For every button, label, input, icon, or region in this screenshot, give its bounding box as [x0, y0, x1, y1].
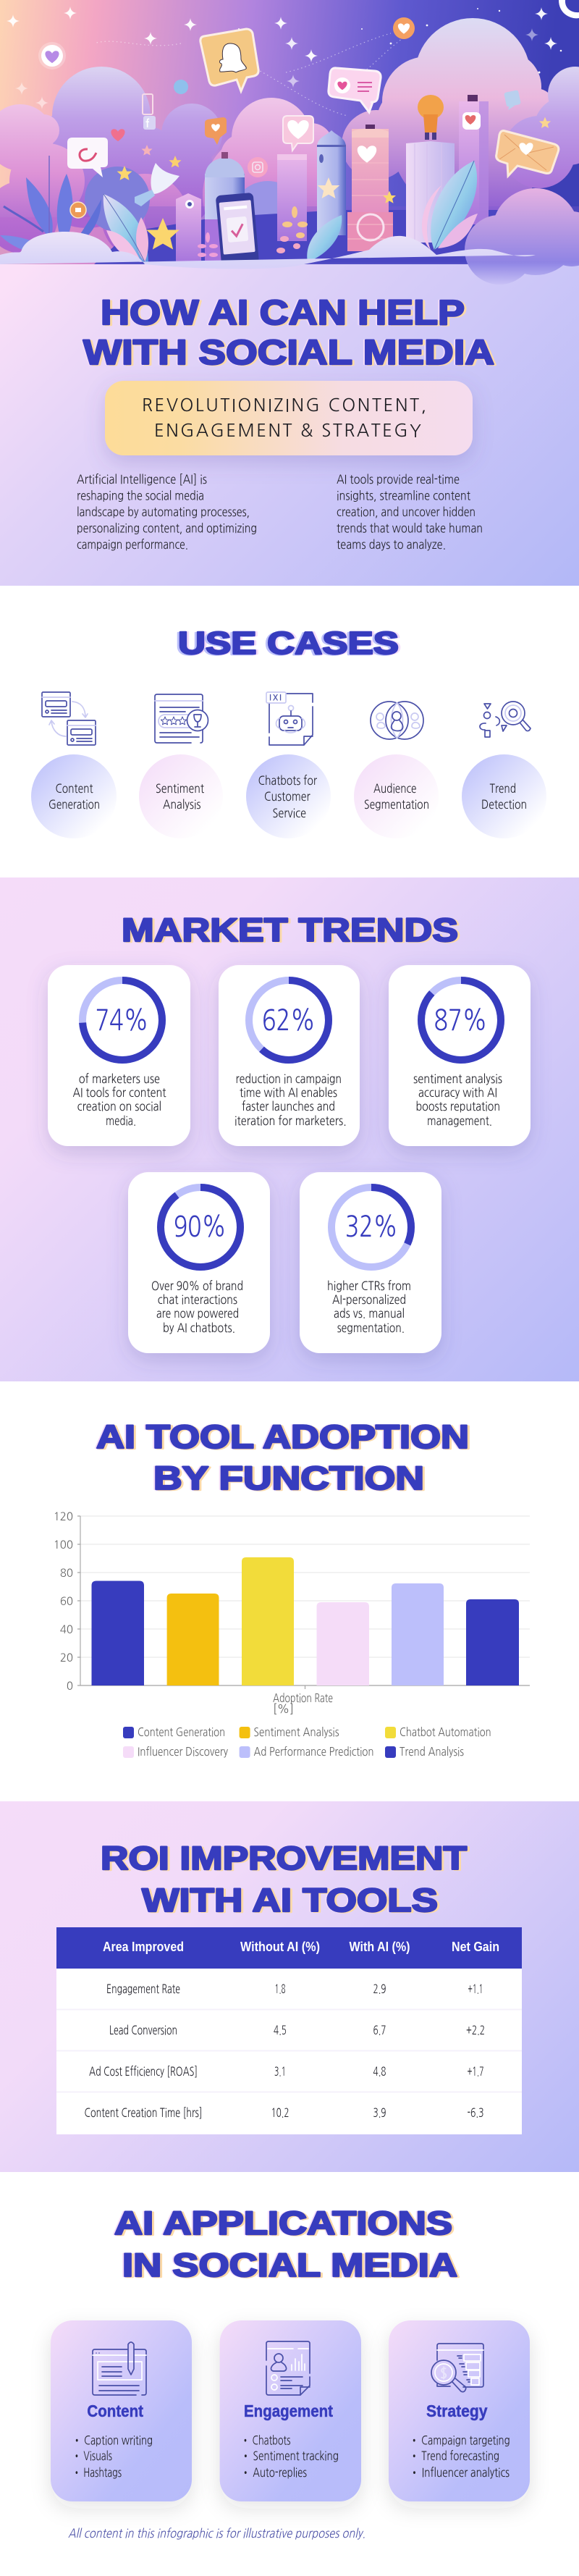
- table: 3.1: [274, 2066, 286, 2078]
- use case labels: Trend: [489, 783, 516, 795]
- table: 1.8: [275, 1983, 285, 1995]
- intro text left: Artificial Intelligence [AI] is: [77, 473, 207, 486]
- card: 87%: sentiment analysis: [413, 1073, 502, 1085]
- card: content: • Caption writing: [72, 2434, 153, 2447]
- title: HOW AI CAN HELP: [101, 294, 465, 332]
- intro text left: landscape by automating processes,: [77, 506, 250, 518]
- use case labels: Segmentation: [364, 799, 429, 811]
- chart legend: Chatbot Automation: [400, 1727, 491, 1738]
- icon: yellow sprig: [276, 206, 308, 253]
- card: strategy: [389, 2320, 530, 2501]
- card: 74%: 74%: [96, 1006, 149, 1035]
- subtitle pill: REVOLUTIONIZING CONTENT,: [142, 397, 426, 414]
- intro text right: AI tools provide real-time: [337, 473, 460, 486]
- bar chart: 60: [60, 1596, 73, 1607]
- icon: phone with check: [216, 193, 259, 266]
- heading: applications: [114, 2205, 457, 2284]
- icon: magnifier and window: $: [439, 2366, 448, 2381]
- heading: applications: IN SOCIAL MEDIA: [122, 2247, 457, 2284]
- card: 87%: [389, 965, 531, 1146]
- icon: paintbrush: [135, 163, 179, 206]
- intro text right: insights, streamline content: [337, 489, 471, 502]
- icon: chatbot: IXI: [269, 694, 283, 702]
- card: 62%: reduction in campaign: [236, 1073, 342, 1085]
- icon: chat bubble with heart: [329, 68, 381, 112]
- use case labels: Generation: [48, 799, 100, 811]
- bar chart: 80: [60, 1568, 73, 1579]
- icon: snapchat bubble: [200, 29, 258, 91]
- bar chart: 0: [67, 1681, 73, 1692]
- intro text left: reshaping the social media: [77, 489, 204, 502]
- use case labels: Audience: [373, 783, 417, 795]
- icon: floating heart: [111, 129, 125, 141]
- card: 62%: [219, 965, 360, 1146]
- icon: feather leaf left: [103, 194, 148, 264]
- intro text left: personalizing content, and optimizing: [77, 523, 257, 534]
- intro text right: [337, 473, 483, 551]
- title: [83, 294, 494, 372]
- icon: profile report: [266, 2341, 310, 2395]
- card: 87%: accuracy with AI: [418, 1087, 497, 1099]
- card: engagement: • Sentiment tracking: [241, 2450, 339, 2462]
- bar chart: [54, 1512, 530, 1715]
- icon: envelope bubble: [496, 131, 559, 176]
- table: Lead Conversion: [109, 2024, 177, 2037]
- card: 90%: 90%: [174, 1212, 227, 1241]
- table: Without AI (%): [240, 1940, 320, 1954]
- panel: adoption chart: [0, 1381, 579, 1801]
- heading: adoption: [96, 1418, 469, 1497]
- card: 74%: [48, 965, 190, 1146]
- use case labels: Analysis: [163, 799, 201, 811]
- table: -6.3: [468, 2107, 483, 2119]
- table: 3.9: [373, 2107, 386, 2119]
- icon: camera badge: [248, 157, 268, 177]
- icon: small leaf centre: [307, 215, 342, 262]
- icon: pink sprig: [198, 232, 218, 257]
- icon: heart on pink tower: [358, 146, 376, 163]
- back clouds right: [342, 18, 556, 217]
- use case labels: Service: [272, 807, 306, 820]
- dark base: [94, 210, 498, 264]
- card: strategy: • Influencer analytics: [410, 2467, 510, 2479]
- card: 74%: creation on social: [77, 1100, 161, 1113]
- panel: use cases: [0, 586, 579, 877]
- card: strategy: • Trend forecasting: [410, 2450, 499, 2462]
- intro text right: creation, and uncover hidden: [337, 506, 476, 518]
- heading: ROI: [101, 1840, 467, 1919]
- panel: ROI: [0, 1801, 579, 2172]
- icon: thumbs badge: [70, 202, 86, 218]
- icon: lamp: [418, 95, 444, 140]
- heading: market trends: MARKET TRENDS: [122, 912, 458, 948]
- table: With AI (%): [349, 1940, 410, 1954]
- hero illustration: [0, 0, 579, 285]
- panel: market trends: [0, 877, 579, 1381]
- icon: sentiment analysis: [155, 694, 208, 743]
- use case labels: Detection: [481, 799, 527, 811]
- icon: sparkles in the sky: [7, 7, 562, 109]
- icon: orange heart circle: [393, 17, 415, 39]
- icon: white bubble with arc: [67, 138, 108, 177]
- intro text right: trends that would take human: [337, 523, 483, 534]
- table: +1.1: [468, 1983, 483, 1995]
- card: 74%: AI tools for content: [72, 1087, 166, 1099]
- card: 90%: [128, 1172, 270, 1353]
- icon: moon: [559, 0, 579, 18]
- subtitle pill: ENGAGEMENT & STRATEGY: [154, 422, 421, 439]
- icon: trend detection: [480, 702, 531, 737]
- bar chart: 120: [54, 1512, 73, 1523]
- card: 87%: boosts reputation: [415, 1100, 500, 1113]
- use case circles: [31, 754, 546, 838]
- icon: social tile stack: f: [145, 118, 150, 130]
- icon: feather leaf right: [422, 161, 478, 250]
- icon: content generation: [42, 692, 96, 745]
- icon: heart badge on tall pillar: [462, 112, 481, 130]
- table: +1.7: [468, 2066, 483, 2078]
- use case labels: Sentiment: [156, 783, 205, 795]
- use case labels: [48, 775, 527, 820]
- card: strategy: Strategy: [426, 2402, 488, 2420]
- back clouds left: [51, 67, 221, 228]
- chart legend: Influencer Discovery: [138, 1746, 228, 1758]
- table: Area Improved: [103, 1940, 184, 1954]
- bar chart: 100: [54, 1540, 73, 1551]
- towers: [176, 95, 489, 264]
- card: engagement: Engagement: [244, 2402, 333, 2420]
- card: content: • Visuals: [72, 2450, 112, 2462]
- icon: document and pen: [93, 2342, 146, 2395]
- card: engagement: • Chatbots: [241, 2434, 291, 2447]
- card: 90%: Over 90% of brand: [151, 1280, 243, 1292]
- icon: small blue chat: [504, 90, 521, 110]
- card: 62%: time with AI enables: [240, 1087, 337, 1099]
- card: 74%: media.: [106, 1115, 136, 1127]
- bar chart: Adoption Rate: [273, 1693, 333, 1704]
- table: Engagement Rate: [106, 1983, 180, 1995]
- table: [56, 1927, 522, 2134]
- bar chart: 20: [60, 1653, 73, 1664]
- clouds front right: [465, 188, 579, 285]
- snow mounds: [0, 232, 536, 269]
- table: 4.5: [274, 2024, 287, 2037]
- card: 32%: higher CTRs from: [327, 1280, 411, 1292]
- icon: heart bubble: [283, 116, 313, 151]
- icon: fern leaves left: [0, 156, 101, 253]
- heading: use cases: USE CASES: [178, 626, 399, 661]
- heading: applications: AI APPLICATIONS: [114, 2205, 452, 2242]
- table: 2.9: [373, 1983, 386, 1995]
- icon: yellow and cream stars: [117, 117, 551, 249]
- intro text left: campaign performance.: [77, 539, 188, 551]
- panel: intro background: [0, 0, 579, 586]
- chart legend: Content Generation: [138, 1727, 225, 1738]
- card: 62%: iteration for marketers.: [234, 1115, 347, 1127]
- table: Ad Cost Efficiency [ROAS]: [89, 2066, 198, 2078]
- icon: orange heart bubble: [205, 117, 227, 145]
- card: engagement: • Auto-replies: [241, 2467, 307, 2479]
- card: 62%: 62%: [262, 1006, 316, 1035]
- card: 32%: segmentation.: [337, 1322, 405, 1334]
- footer note: All content in this infographic is for illustrative purposes only.: [68, 2527, 365, 2540]
- table: 6.7: [373, 2024, 386, 2037]
- card: 87%: management.: [427, 1115, 492, 1127]
- card: 90%: by AI chatbots.: [163, 1322, 235, 1334]
- intro text left: [77, 473, 257, 551]
- card: engagement: [220, 2320, 361, 2501]
- table: 10.2: [271, 2107, 290, 2119]
- card: content: Content: [87, 2402, 143, 2420]
- panel: applications: [0, 2172, 579, 2576]
- heading: ROI: ROI IMPROVEMENT: [101, 1840, 467, 1877]
- icon: magnifier and window: [431, 2344, 483, 2392]
- table: Net Gain: [452, 1940, 499, 1954]
- icon: chatbot: [266, 692, 313, 745]
- card: content: • Hashtags: [72, 2467, 122, 2479]
- icon: social tile stack: [143, 94, 156, 130]
- card: 90%: chat interactions: [158, 1294, 237, 1306]
- subtitle pill: [105, 381, 473, 455]
- card: 90%: are now powered: [156, 1308, 239, 1320]
- icon: audience segmentation: [371, 702, 423, 739]
- intro text right: teams days to analyze.: [337, 539, 446, 551]
- card: 32%: [300, 1172, 441, 1353]
- card: 32%: AI-personalized: [332, 1294, 406, 1306]
- heading: ROI: WITH AI TOOLS: [142, 1882, 438, 1919]
- table: +2.2: [466, 2024, 485, 2037]
- card: 87%: 87%: [434, 1006, 488, 1035]
- chart legend: Ad Performance Prediction: [253, 1746, 373, 1758]
- heading: adoption: AI TOOL ADOPTION: [96, 1418, 469, 1455]
- icon: teal badge: [174, 80, 188, 94]
- chart legend: Sentiment Analysis: [253, 1727, 339, 1738]
- dotted flight path: [94, 33, 405, 116]
- use case labels: Chatbots for: [258, 775, 318, 787]
- icon: ring: [358, 214, 384, 240]
- card: 74%: of marketers use: [79, 1073, 160, 1085]
- card: 62%: faster launches and: [242, 1100, 335, 1113]
- table: Content Creation Time [hrs]: [84, 2107, 203, 2119]
- bar chart: 40: [60, 1625, 73, 1636]
- table: 4.8: [373, 2066, 386, 2078]
- heading: adoption: BY FUNCTION: [153, 1460, 424, 1497]
- chart legend: [123, 1727, 491, 1758]
- card: 32%: ads vs. manual: [334, 1308, 405, 1320]
- card: content: [51, 2320, 192, 2501]
- use case labels: Content: [55, 783, 93, 795]
- card: 32%: 32%: [345, 1212, 398, 1241]
- bar chart: [%]: [273, 1703, 294, 1715]
- title: WITH SOCIAL MEDIA: [83, 334, 494, 372]
- icon: heart sun: [38, 42, 66, 70]
- card: strategy: • Campaign targeting: [410, 2434, 510, 2447]
- chart legend: Trend Analysis: [400, 1746, 464, 1758]
- use case labels: Customer: [264, 791, 310, 803]
